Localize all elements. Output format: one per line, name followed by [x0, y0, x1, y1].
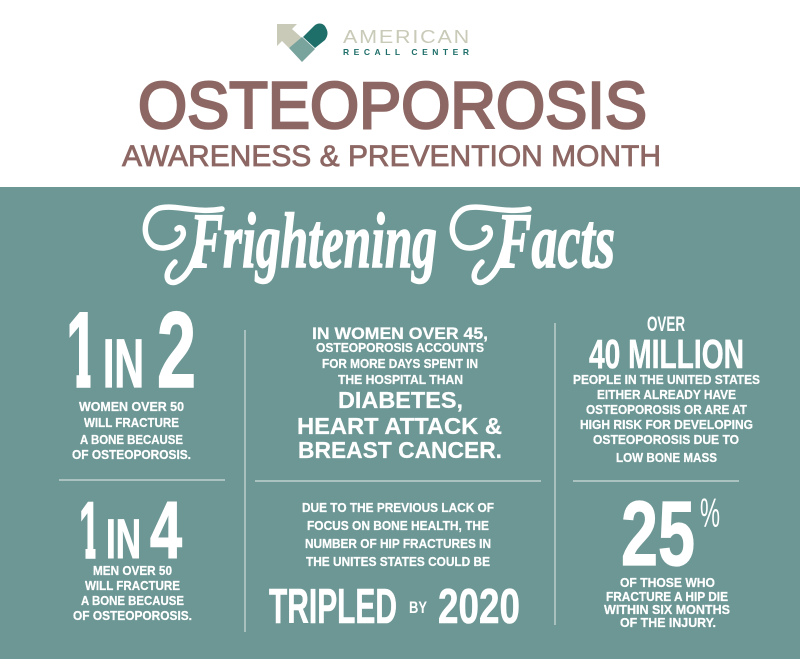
logo wordmark bottom: RECALL CENTER — [343, 47, 469, 57]
logo: American Recall Center — [277, 24, 471, 62]
stat: hip fractures tripled by 2020: BY — [409, 598, 427, 617]
title: OSTEOPOROSIS — [138, 68, 647, 142]
stat: over 40 million: OSTEOPOROSIS DUE TO — [593, 432, 739, 447]
stat: 25 percent: % — [700, 490, 720, 536]
stat: 1 in 2 women: 2 — [157, 289, 196, 410]
stat: hip fractures tripled by 2020: TRIPLED — [269, 580, 397, 634]
stat: women over 45 hospital days: BREAST CANCER. — [298, 437, 502, 463]
stat: 1 in 2 women: A BONE BECAUSE — [80, 432, 183, 447]
stat: women over 45 hospital days: OSTEOPOROSIS ACCOUNTS — [316, 340, 484, 355]
icon: logo arrow heart — [277, 24, 328, 62]
stat: women over 45 hospital days: FOR MORE DAYS SPENT IN — [322, 356, 478, 371]
stat: 25 percent: OF THE INJURY. — [620, 615, 716, 630]
stat: over 40 million: HIGH RISK FOR DEVELOPING — [580, 417, 753, 432]
stat: over 40 million: OSTEOPOROSIS OR ARE AT — [586, 402, 747, 417]
stat: 25 percent: OF THOSE WHO — [620, 575, 715, 590]
stat: 1 in 4 men: WILL FRACTURE — [85, 578, 180, 593]
stat: 1 in 4 men: A BONE BECAUSE — [81, 593, 184, 608]
stat: 1 in 4 men: MEN OVER 50 — [93, 563, 172, 578]
stat: over 40 million: OVER — [647, 313, 685, 336]
stat: over 40 million: EITHER ALREADY HAVE — [597, 387, 736, 402]
stat: women over 45 hospital days — [297, 324, 502, 463]
stat: 25 percent: FRACTURE A HIP DIE — [606, 589, 728, 604]
stat: 1 in 4 men: OF OSTEOPOROSIS. — [73, 608, 192, 623]
stat: hip fractures tripled by 2020: THE UNITES STATES COULD BE — [306, 554, 490, 569]
stat: 25 percent: 25 — [621, 483, 695, 585]
stat: hip fractures tripled by 2020: DUE TO THE PREVIOUS LACK OF — [302, 500, 494, 515]
stat: 1 in 2 women: IN — [103, 325, 144, 402]
stat: 1 in 2 women: WOMEN OVER 50 — [79, 399, 184, 414]
stat: women over 45 hospital days: HEART ATTACK & — [297, 413, 502, 439]
stat: women over 45 hospital days: DIABETES, — [338, 387, 463, 413]
logo wordmark top: AMERICAN — [343, 27, 471, 47]
stat: over 40 million: LOW BONE MASS — [616, 450, 717, 465]
stat: 1 in 4 men — [73, 502, 192, 620]
heading: Frightening Facts: Facts — [496, 197, 615, 284]
stat: over 40 million: PEOPLE IN THE UNITED STATES — [573, 372, 760, 387]
stat: over 40 million — [573, 313, 760, 465]
stat: women over 45 hospital days: IN WOMEN OVER 45, — [312, 324, 488, 343]
stat: hip fractures tripled by 2020 — [269, 500, 520, 634]
stat: women over 45 hospital days: THE HOSPITAL THAN — [338, 372, 463, 387]
stat: 1 in 2 women — [70, 310, 194, 460]
stat: hip fractures tripled by 2020: NUMBER OF HIP FRACTURES IN — [305, 536, 491, 551]
stat: 1 in 2 women: 1 — [66, 289, 98, 410]
stat: 1 in 4 men: IN — [106, 507, 141, 570]
stat: 25 percent: WITHIN SIX MONTHS — [604, 602, 730, 617]
heading: Frightening Facts: Frightening — [189, 197, 437, 284]
panel: teal background — [0, 187, 800, 659]
stat: hip fractures tripled by 2020: 2020 — [438, 580, 520, 634]
stat: 1 in 4 men: 1 — [79, 486, 100, 576]
stat: 25 percent — [604, 483, 730, 630]
stat: 1 in 4 men: 4 — [150, 486, 182, 576]
subtitle: AWARENESS & PREVENTION MONTH — [122, 140, 661, 173]
stat: 1 in 2 women: OF OSTEOPOROSIS. — [72, 447, 191, 462]
stat: 1 in 2 women: WILL FRACTURE — [84, 415, 179, 430]
stat: hip fractures tripled by 2020: FOCUS ON BONE HEALTH, THE — [307, 518, 489, 533]
